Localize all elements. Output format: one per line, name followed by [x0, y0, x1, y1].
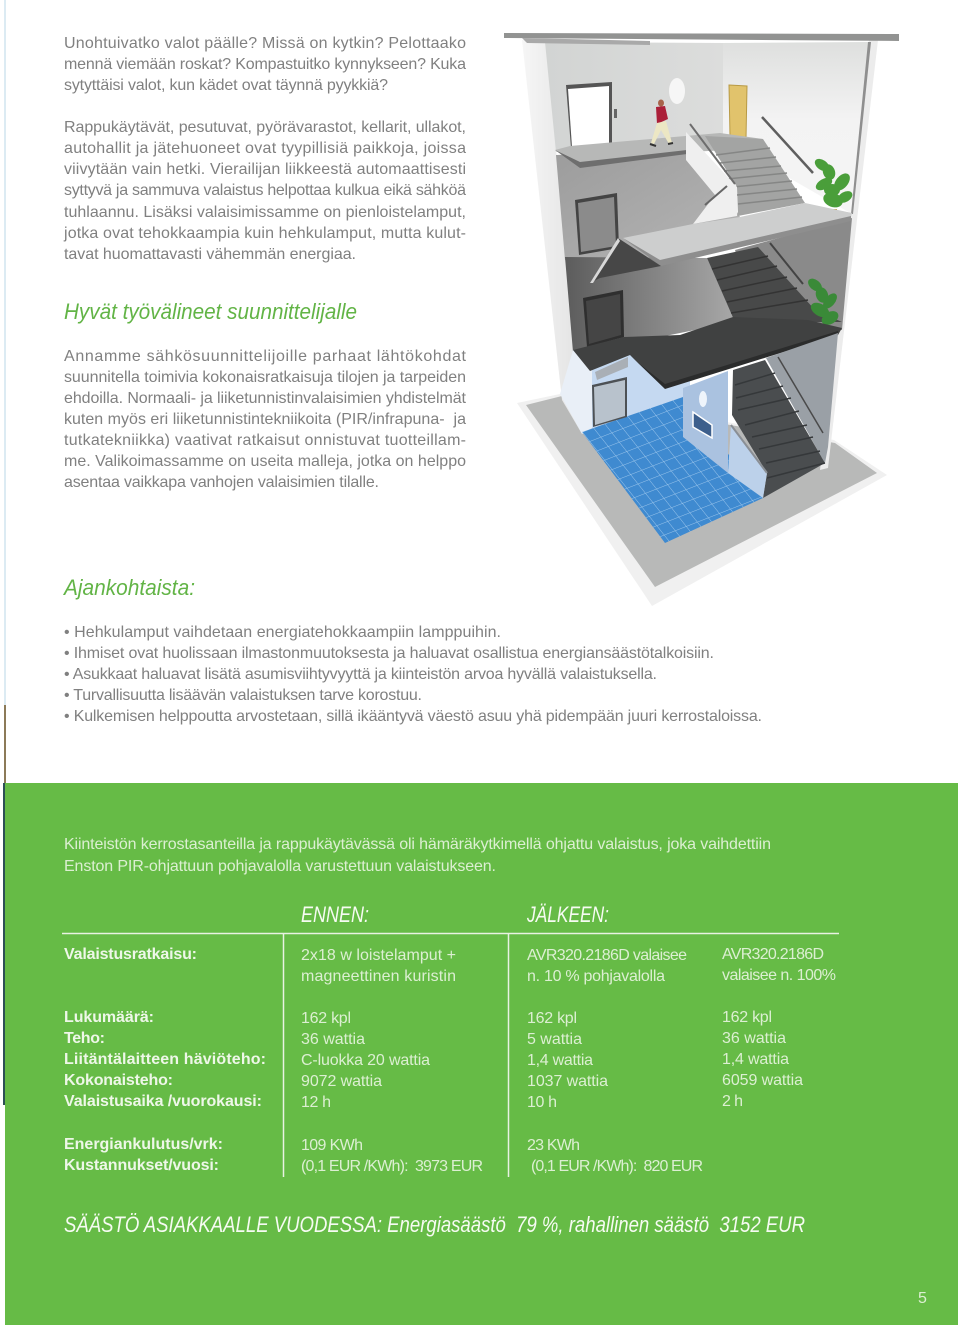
bullet list: current topics: • Ihmiset ovat huolissaan ilmastonmuutoksesta ja haluavat osallistua energiansäästötalkoisiin.	[64, 645, 714, 662]
designers text block: ehdoilla. Normaali- ja liiketunnistinvalaisimien yhdistelmät	[64, 390, 467, 407]
heading: current topics: Ajankohtaista:	[62, 575, 195, 600]
intro text block: syttyvä ja sammuva valaistus helpottaa kulkua eikä sähköä	[64, 182, 466, 199]
designers text block: suunnitella toimivia kokonaisratkaisuja tilojen ja tarpeiden	[64, 369, 466, 386]
intro text block: Unohtuivatko valot päälle? Missä on kytkin? Pelottaako	[64, 35, 466, 52]
ground level door	[592, 377, 627, 427]
column: after values, full light: 1,4 wattia	[722, 1051, 789, 1068]
row labels: Valaistusaika /vuorokausi:	[64, 1093, 262, 1110]
left outer wall	[522, 40, 582, 434]
wall heater	[693, 412, 712, 438]
lower level back wall	[565, 257, 735, 352]
row labels: Teho:	[64, 1030, 105, 1047]
column: before values: 12 h	[301, 1094, 331, 1111]
case study intro	[64, 836, 771, 875]
ground level right wall	[766, 333, 838, 463]
parapet wall and handrail	[686, 124, 737, 224]
middle door	[575, 193, 619, 255]
stair underside ground level	[595, 357, 628, 380]
column: after values, base light	[527, 947, 703, 1175]
bullet list: current topics: • Hehkulamput vaihdetaan energiatehokkaampiin lamppuihin.	[64, 624, 501, 641]
column: after values, base light: n. 10 % pohjavalolla	[527, 968, 665, 985]
column: after values, base light: 23 KWh	[527, 1137, 580, 1154]
row labels	[64, 946, 266, 1174]
plant upper	[813, 156, 854, 219]
intro text block: tavat huomattavasti vähemmän energiaa.	[64, 246, 356, 263]
column: after values, base light: 1,4 wattia	[527, 1052, 593, 1069]
row labels: Valaistusratkaisu:	[64, 946, 197, 963]
ground level back wall	[573, 345, 690, 432]
column: before values: (0,1 EUR /KWh): 3973 EUR	[301, 1158, 483, 1175]
intro text block: jotka ovat tehokkaampia kuin hehkulamput, mutta kulut-	[63, 225, 466, 242]
intro text block: Rappukäytävät, pesutuvat, pyörävarastot, kellarit, ullakot,	[64, 119, 466, 136]
row labels: Liitäntälaitteen häviöteho:	[64, 1051, 266, 1068]
column: after values, base light: 162 kpl	[527, 1010, 577, 1027]
column: after values, base light: AVR320.2186D valaisee	[527, 947, 687, 964]
bullet list: current topics: • Asukkaat haluavat lisätä asumisviihtyvyyttä ja kiinteistön arvoa hyvällä valaistuksella.	[64, 666, 657, 683]
row labels: Energiankulutus/vrk:	[64, 1136, 223, 1153]
column: before values: 109 KWh	[301, 1137, 363, 1154]
designers text block: asentaa vaikkapa vanhojen valaisimien tilalle.	[64, 474, 379, 491]
ground stairs	[732, 360, 825, 498]
dark landing slab	[573, 317, 842, 389]
wall lamp glow	[669, 78, 685, 104]
illustration: stairwell cross-section	[504, 33, 899, 606]
case study intro: Enston PIR-ohjattuun pohjavalolla varustettuun valaistukseen.	[64, 858, 496, 875]
column: after values, base light: (0,1 EUR /KWh): 820 EUR	[531, 1158, 703, 1175]
lower plant	[806, 276, 841, 328]
column: after values, full light: 6059 wattia	[722, 1072, 803, 1089]
lower door	[583, 290, 624, 347]
top level right wall	[723, 42, 870, 214]
column: before values: 162 kpl	[301, 1010, 351, 1027]
intro text block	[63, 35, 466, 263]
blue tile floor	[582, 397, 763, 543]
designers text block: tutkatekniikka) vaativat ratkaisut onnistuvat tuotteillam-	[64, 432, 466, 449]
savings summary: SÄÄSTÖ ASIAKKAALLE VUODESSA: Energiasäästö 79 %, rahallinen säästö 3152 EUR	[64, 1212, 805, 1237]
upper stairs	[705, 136, 805, 216]
column heading: after: JÄLKEEN:	[526, 902, 609, 927]
panel: case study	[5, 783, 958, 1325]
bullet list: current topics: • Kulkemisen helppoutta arvostetaan, sillä ikääntyvä väestö asuu yhä pidempään juuri kerrostaloissa.	[64, 708, 762, 725]
column: after values, full light: valaisee n. 100%	[722, 967, 836, 984]
ground plate	[517, 394, 887, 606]
designers text block: Annamme sähkösuunnittelijoille parhaat lähtökohdat	[64, 348, 467, 365]
column heading: before: ENNEN:	[301, 902, 369, 927]
column: before values	[301, 947, 483, 1175]
column: after values, full light: 2 h	[722, 1093, 743, 1110]
designers text block	[64, 348, 467, 491]
lower right wall handrail	[770, 243, 803, 284]
column: before values: 36 wattia	[301, 1031, 365, 1048]
middle level back wall	[556, 150, 740, 262]
designers text block: kuten myös eri liiketunnistintekniikoita (PIR/infrapuna- ja	[64, 411, 466, 428]
intro text block: mennä viemään roskat? Kompastuitko kynnykseen? Kuka	[64, 56, 466, 73]
right handrail	[762, 117, 813, 173]
page edge bleed	[3, 0, 6, 1105]
column: after values, base light: 10 h	[527, 1094, 557, 1111]
column: after values, full light: 162 kpl	[722, 1009, 772, 1026]
column: after values, full light: AVR320.2186D	[722, 946, 824, 963]
column: after values, full light	[722, 946, 836, 1110]
row labels: Lukumäärä:	[64, 1009, 154, 1026]
underside of stairs	[590, 238, 661, 283]
top level back wall	[545, 42, 723, 152]
bullet list: current topics: • Turvallisuutta lisäävän valaistuksen tarve korostuu.	[64, 687, 422, 704]
person walking	[650, 100, 673, 146]
low stair wall	[728, 425, 767, 498]
intro text block: sytyttäisi valot, kun kädet ovat täynnä pyykkiä?	[64, 77, 388, 94]
intro text block: tuhlaannu. Lisäksi valaisimissamme on pienloistelamput,	[64, 204, 466, 221]
page number: 5	[918, 1290, 927, 1307]
column: before values: magneettinen kuristin	[301, 968, 456, 985]
bullet list: current topics	[64, 624, 762, 725]
column: before values: C-luokka 20 wattia	[301, 1052, 430, 1069]
top floor slab	[555, 133, 763, 168]
elevator door top	[566, 82, 617, 148]
case study intro: Kiinteistön kerrostasanteilla ja rappukäytävässä oli hämäräkytkimellä ohjattu valaistus, joka vaihdettiin	[64, 836, 771, 853]
column: after values, base light: 1037 wattia	[527, 1073, 608, 1090]
right outer wall	[820, 40, 878, 470]
row labels: Kustannukset/vuosi:	[64, 1157, 219, 1174]
column: after values, full light: 36 wattia	[722, 1030, 786, 1047]
roof slab	[504, 33, 899, 45]
heading: tools for designers: Hyvät työvälineet suunnittelijalle	[64, 299, 357, 324]
middle landing slab	[623, 203, 852, 266]
intro text block: autohallit ja jätehuoneet ovat tyypillisiä paikkoja, joissa	[64, 140, 466, 157]
column: after values, base light: 5 wattia	[527, 1031, 582, 1048]
designers text block: me. Valikoimassamme on useita malleja, jotka on helppo	[64, 453, 466, 470]
table rules	[62, 933, 839, 1177]
row labels: Kokonaisteho:	[64, 1072, 173, 1089]
lower stairs	[707, 247, 842, 322]
column: before values: 9072 wattia	[301, 1073, 382, 1090]
yellow door	[729, 85, 747, 139]
wall lamp glow lower	[699, 391, 707, 407]
wall handrail	[778, 357, 823, 433]
column: before values: 2x18 w loistelamput +	[301, 947, 456, 964]
intro text block: viivytään vain hetki. Vierailijan liikkeestä automaattisesti	[64, 161, 466, 178]
lower level right wall	[735, 218, 852, 330]
pillar wall	[683, 371, 728, 473]
